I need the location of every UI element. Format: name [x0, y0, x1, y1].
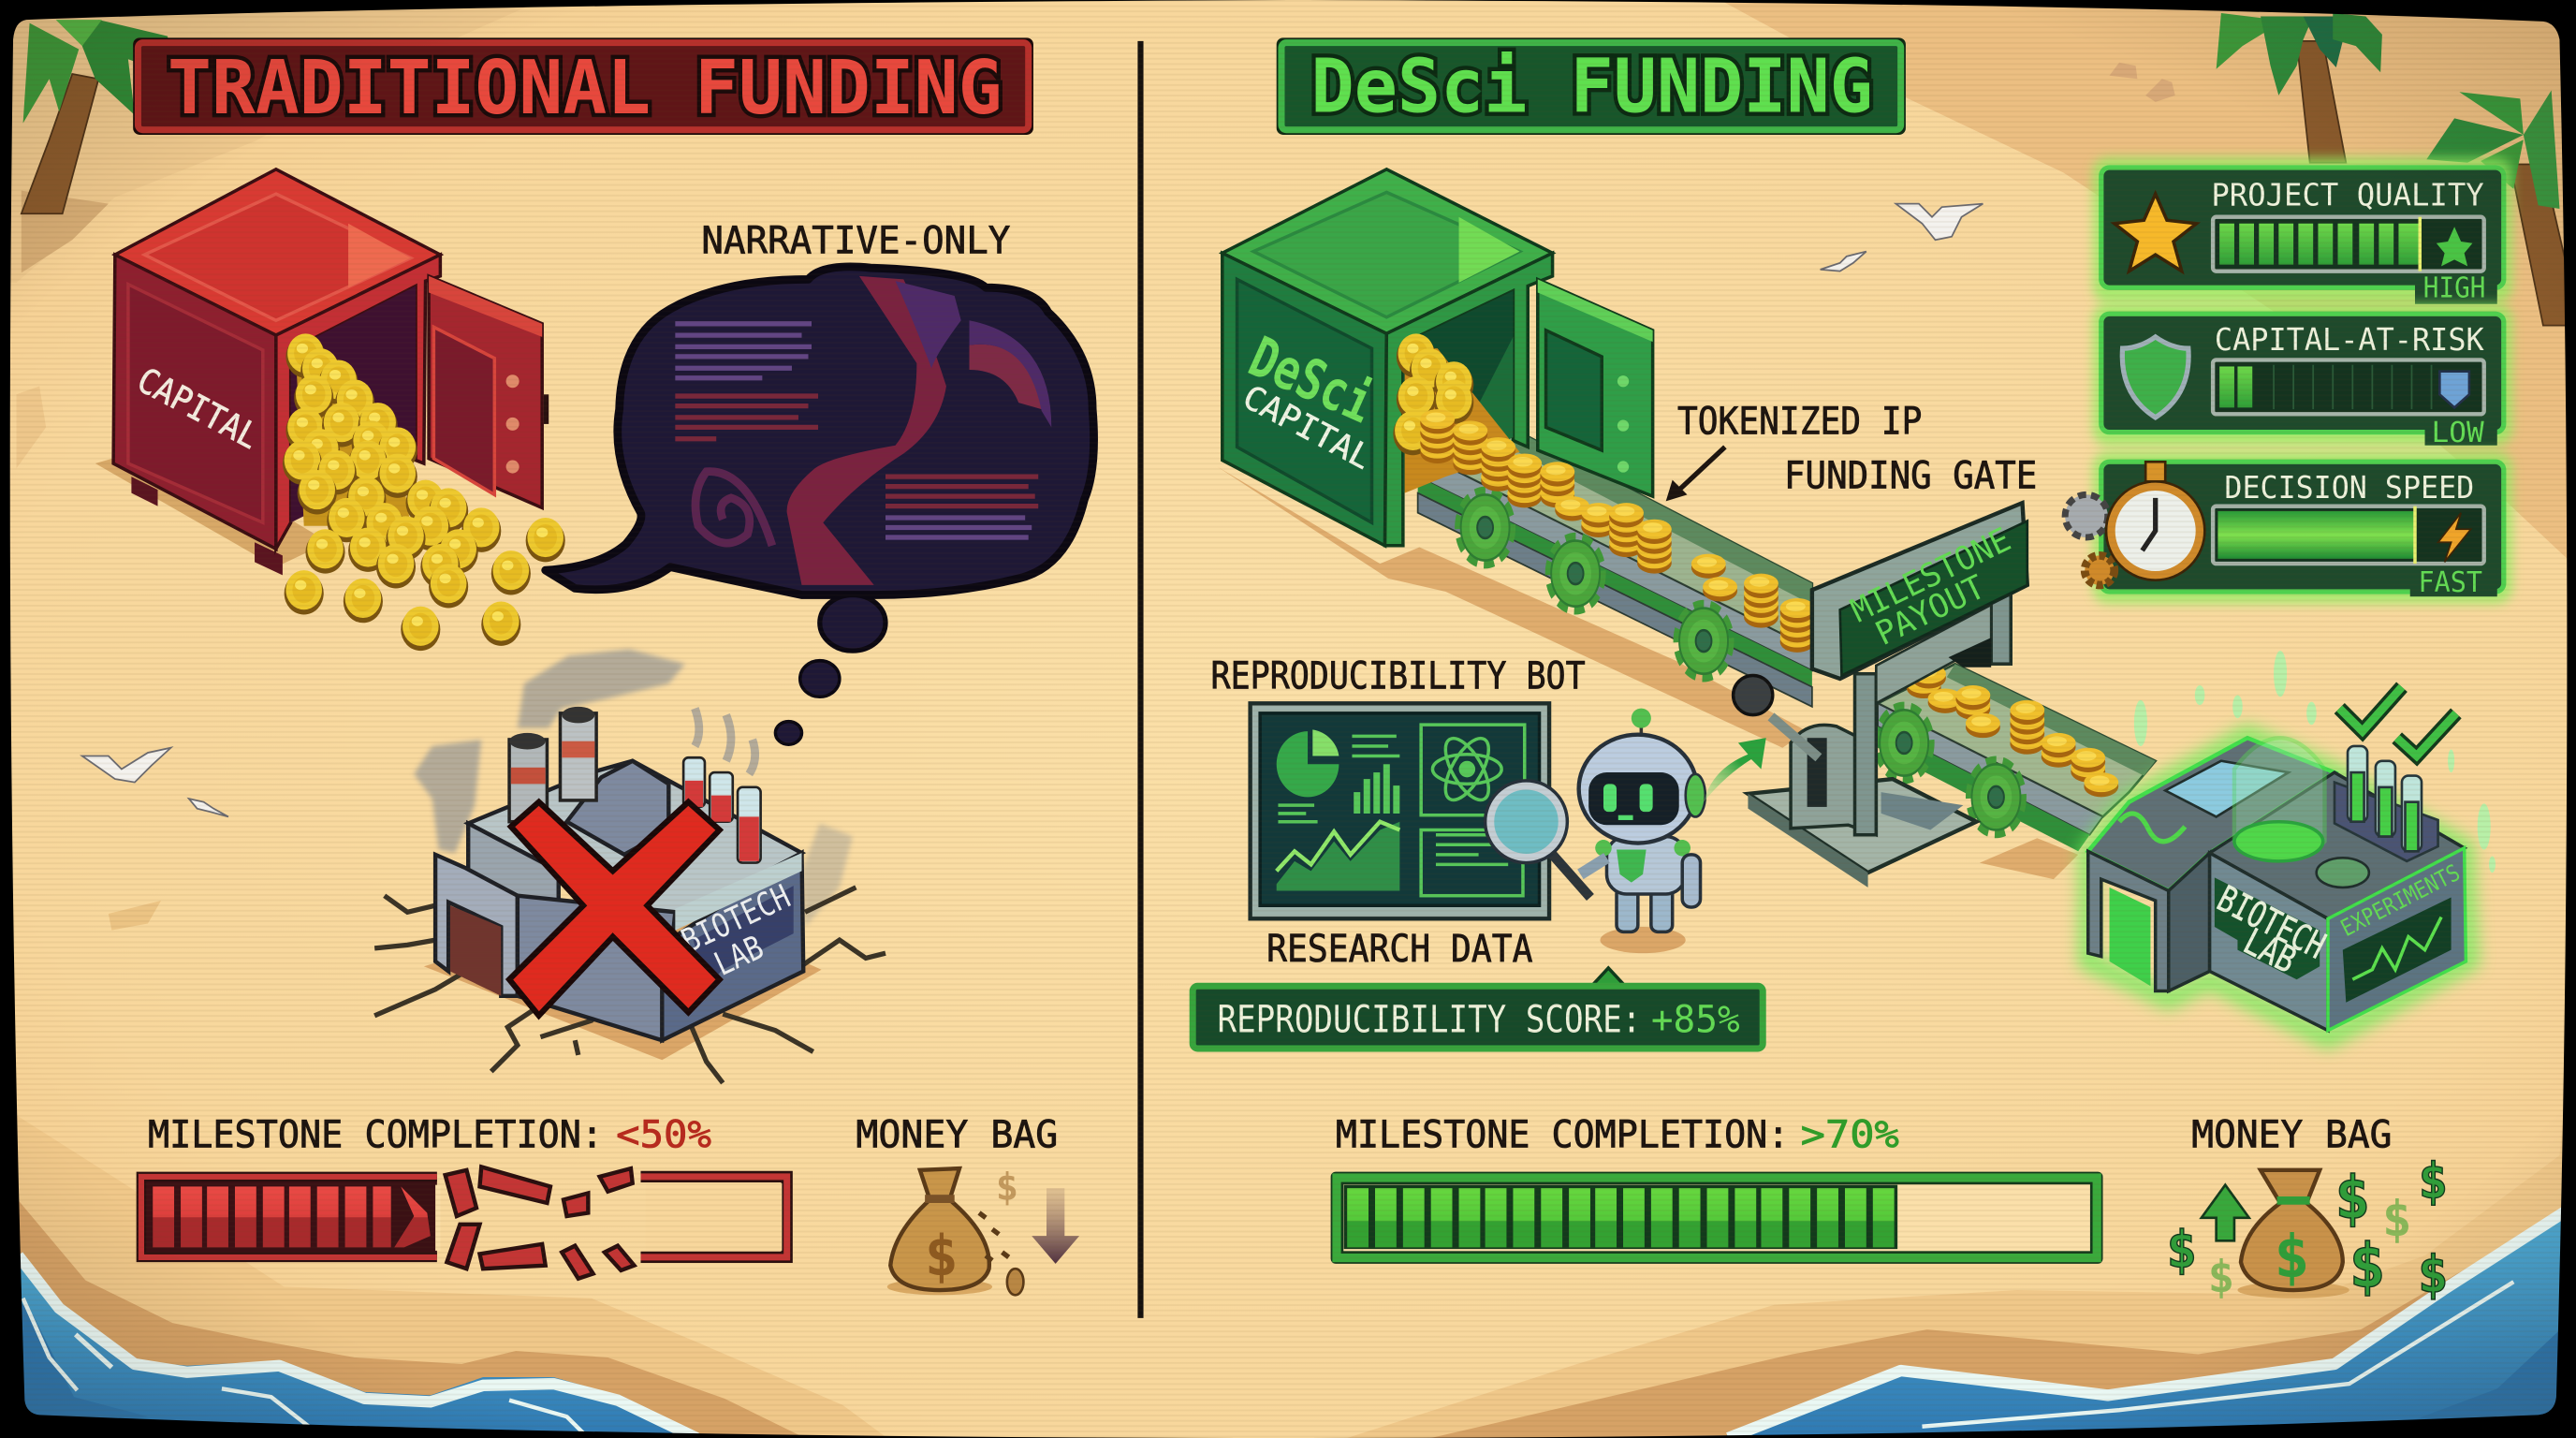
safe door: [429, 276, 549, 507]
label: reproducibility bot: REPRODUCIBILITY BOT: [1211, 654, 1586, 698]
metric panel: capital-at-risk: CAPITAL-AT-RISK: [2215, 321, 2484, 358]
label: desci capital: DeSci: [1239, 325, 1383, 436]
sign: biotech lab: LAB: [2236, 920, 2303, 982]
metric panel: capital-at-risk: [2100, 311, 2506, 449]
green test tubes: [2334, 746, 2438, 861]
reproducibility score badge: +85%: [1651, 997, 1740, 1041]
gold coins: [283, 333, 565, 651]
cracks: [374, 888, 886, 1083]
sign: biotech lab: BIOTECH: [2210, 878, 2332, 968]
checkmarks: [2339, 687, 2456, 756]
red x: [509, 802, 720, 1016]
magnifier: [1486, 781, 1590, 897]
metric panel: project quality: [2100, 165, 2506, 305]
research data monitor: [1251, 703, 1549, 918]
lever mount: [1791, 725, 1876, 835]
safe door: [1538, 279, 1653, 496]
label: research data: RESEARCH DATA: [1266, 927, 1533, 971]
money bag with rising dollars: [2166, 1153, 2449, 1304]
reproducibility score badge: REPRODUCIBILITY SCORE:: [1218, 997, 1641, 1041]
label: tokenized ip with arrow: TOKENIZED IP: [1677, 399, 1922, 443]
smoke: [414, 649, 853, 927]
wing with arch: [2088, 738, 2334, 991]
label: desci capital: [1237, 325, 1383, 477]
label: milestone completion left: MILESTONE COMPLETION:: [148, 1112, 603, 1156]
label: desci capital: CAPITAL: [1237, 378, 1378, 477]
test tubes: [683, 757, 761, 863]
healthy biotech lab glowing: [2088, 651, 2496, 1038]
metric panel: decision speed: [2065, 459, 2506, 599]
label: milestone completion right: >70%: [1801, 1112, 1899, 1156]
palm tree: top left: [22, 20, 174, 272]
chimney: [509, 707, 596, 822]
money bag with rising dollars: $: [2349, 1231, 2386, 1302]
label: funding gate: FUNDING GATE: [1784, 453, 2037, 497]
title: traditional funding: TRADITIONAL FUNDING: [168, 45, 1003, 131]
money bag losing coins: $: [996, 1165, 1018, 1209]
title: desci funding: DeSci FUNDING: [1311, 43, 1873, 129]
money bag losing coins: $: [925, 1225, 959, 1289]
money bag with rising dollars: $: [2208, 1252, 2234, 1303]
glass dome: [2234, 738, 2324, 861]
narrative text lines: [675, 324, 1038, 537]
conveyor belt with tokenized coins: [1218, 431, 2156, 879]
factory body: [435, 761, 803, 1040]
bar chart: [1354, 764, 1399, 814]
label: experiments: EXPERIMENTS: [2336, 858, 2465, 942]
label: capital: CAPITAL: [131, 360, 266, 457]
money bag with rising dollars: $: [2418, 1153, 2448, 1211]
icon: stopwatch and gears: [2065, 462, 2204, 585]
green progress bar: [1332, 1173, 2101, 1262]
money bag losing coins: [887, 1165, 1079, 1295]
line chart: [1277, 822, 1399, 890]
divider between columns: [1137, 41, 1144, 1318]
seagulls: [82, 204, 1983, 816]
green safe: [1222, 169, 1653, 546]
palm trees: top right: [2217, 13, 2568, 326]
metric panel: capital-at-risk: LOW: [2432, 417, 2484, 449]
label: money bag right: MONEY BAG: [2191, 1112, 2392, 1156]
sign: milestone payout: [1812, 503, 2027, 679]
label: milestone completion right: MILESTONE COMPLETION:: [1336, 1112, 1789, 1156]
money bag with rising dollars: $: [2334, 1163, 2370, 1232]
metric panel: project quality: HIGH: [2423, 272, 2485, 305]
money bag with rising dollars: $: [2166, 1219, 2197, 1279]
label: biotech lab: [676, 877, 797, 984]
label: biotech lab: BIOTECH: [676, 877, 797, 961]
sparkles: [2134, 651, 2496, 873]
metric panel: project quality: PROJECT QUALITY: [2211, 176, 2484, 213]
arrow: up: [2202, 1185, 2249, 1240]
red safe spilling coins: [95, 169, 549, 575]
gears: [1459, 493, 2022, 831]
metric panel: decision speed: FAST: [2419, 566, 2482, 599]
pie chart: [1277, 731, 1339, 797]
label: narrative-only: NARRATIVE-ONLY: [701, 218, 1010, 262]
sign: milestone payout: PAYOUT: [1869, 567, 1991, 653]
failed biotech lab with cracks: [374, 649, 886, 1083]
thought cloud: murky narrative: [546, 267, 1094, 744]
label: milestone completion left: <50%: [616, 1112, 711, 1156]
gold stacks on belt: [1393, 333, 2118, 797]
money bag with rising dollars: $: [2418, 1244, 2449, 1304]
sea foam: [18, 1205, 2576, 1438]
reproducibility robot with magnifier: [1486, 709, 1766, 953]
money bag with rising dollars: $: [2274, 1222, 2309, 1291]
lever: [1771, 716, 1819, 757]
sign: milestone payout: MILESTONE: [1845, 521, 2017, 630]
metric panel: decision speed: DECISION SPEED: [2224, 469, 2474, 506]
reproducibility score badge: [1193, 968, 1763, 1049]
arrow: down: [1032, 1188, 1079, 1264]
label: biotech lab: LAB: [709, 928, 769, 984]
screen: [2343, 897, 2452, 1003]
money bag with rising dollars: $: [2382, 1191, 2412, 1248]
atom: [1421, 725, 1525, 815]
label: tokenized ip with arrow: [1666, 399, 1922, 501]
broken red progress bar: [141, 1167, 787, 1279]
label: money bag left: MONEY BAG: [856, 1112, 1058, 1156]
funding gate with milestone payout sign: [1734, 503, 2027, 888]
arrow: to lever: [1704, 738, 1766, 802]
